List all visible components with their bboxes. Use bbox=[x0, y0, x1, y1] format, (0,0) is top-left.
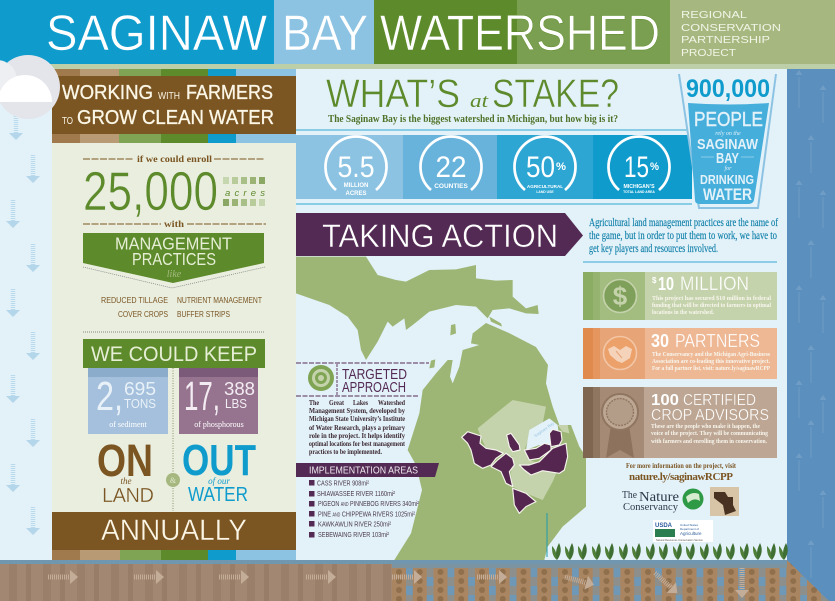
25,000 acres: 25,000 bbox=[83, 160, 218, 222]
implementation areas list bbox=[309, 478, 419, 539]
stat: tons of sediment bbox=[88, 368, 168, 434]
stats strip bbox=[296, 130, 692, 204]
practices list: REDUCED TILLAGE bbox=[101, 296, 168, 305]
heading: what's at stake: STAKE? bbox=[492, 72, 619, 116]
heading banner: TO bbox=[62, 116, 73, 127]
stat: 5.5 million acres bbox=[325, 136, 386, 197]
stat: 15% michigan's land area: TOTAL LAND AREA bbox=[623, 190, 655, 194]
stat: 50% agricultural land bbox=[514, 136, 575, 194]
implementation areas heading bbox=[296, 463, 439, 477]
subtitle: regional conservation partnership project bbox=[681, 10, 781, 59]
logo: michigan agri-business bbox=[710, 487, 739, 516]
soil band with arrows bbox=[0, 560, 829, 601]
management practices banner: MANAGEMENT bbox=[115, 234, 232, 254]
icon: glass of water, 900,000 people: PEOPLE bbox=[694, 109, 763, 131]
icon: medal bbox=[602, 394, 638, 458]
practices list: COVER CROPS bbox=[118, 310, 168, 319]
out of our water bbox=[182, 436, 256, 506]
icon: glass of water, 900,000 people: DRINKING bbox=[700, 172, 754, 187]
icon: glass of water, 900,000 people bbox=[679, 74, 776, 208]
stat: lbs of phosphorous: LBS bbox=[225, 396, 247, 411]
stat: 5.5 million acres: ACRES bbox=[345, 191, 367, 197]
panel: $10 million: funding that will be directed to farmers in optimal bbox=[652, 302, 771, 309]
stat: 15% michigan's land area bbox=[608, 136, 670, 194]
icon: dollar bbox=[604, 280, 636, 312]
targeted approach paragraph: Lakes bbox=[353, 398, 368, 407]
panel: 30 partners: Association are co-leading this innovative project. bbox=[652, 358, 770, 365]
logo: usda: Agriculture bbox=[680, 531, 702, 536]
implementation areas list: KAWKAWLIN RIVER 250mi² bbox=[318, 520, 391, 528]
panel: 100 certified crop advisors: 100 bbox=[651, 392, 679, 409]
management practices banner: like bbox=[167, 269, 182, 280]
implementation areas list: PIGEON AND PINNEBOG RIVERS 340mi² bbox=[318, 499, 419, 508]
panel: $10 million bbox=[583, 272, 777, 320]
heading banner bbox=[52, 76, 296, 134]
stat: 5.5 million acres: 5.5 bbox=[338, 151, 374, 184]
title: SAGINAW bbox=[46, 5, 268, 61]
implementation areas heading: IMPLEMENTATION AREAS bbox=[309, 466, 418, 476]
colour strip top bbox=[52, 69, 296, 143]
what's at stake subtitle: The Saginaw Bay is the biggest watershed in Michigan, but how big is it? bbox=[328, 114, 618, 125]
targeted approach paragraph: optimal locations for best management bbox=[309, 439, 405, 448]
stat: 50% agricultural land: LAND USE bbox=[536, 190, 554, 194]
panel: 100 certified crop advisors bbox=[583, 387, 777, 458]
stat: 5.5 million acres: MILLION bbox=[344, 183, 368, 189]
heading banner: GROW CLEAN WATER bbox=[77, 107, 274, 129]
targeted approach paragraph: Great bbox=[329, 398, 344, 407]
right water column with up arrows bbox=[787, 69, 835, 601]
upper peninsula bbox=[296, 257, 539, 360]
panel: 100 certified crop advisors: CROP ADVISORS bbox=[651, 407, 769, 424]
practices list: BUFFER STRIPS bbox=[177, 310, 230, 319]
management practices banner: PRACTICES bbox=[132, 249, 216, 269]
logo: usda: Department of bbox=[680, 527, 699, 531]
targeted approach paragraph: Watershed bbox=[378, 398, 406, 407]
panel: working with farmers bbox=[52, 69, 296, 560]
stat: tons of sediment: TONS bbox=[124, 396, 156, 411]
panel: $10 million: MILLION bbox=[680, 274, 749, 295]
targeted approach paragraph: practices to be implemented. bbox=[309, 447, 382, 456]
stat: tons of sediment: of sediment bbox=[109, 420, 148, 429]
taking action intro bbox=[589, 217, 778, 255]
stat: 22 counties: 22 bbox=[436, 151, 466, 184]
stat: lbs of phosphorous: 388 bbox=[224, 379, 255, 399]
map of michigan bbox=[296, 257, 586, 560]
panel: 30 partners bbox=[583, 328, 777, 379]
subtitle: regional conservation partnership project: PARTNERSHIP bbox=[681, 35, 770, 46]
more information: For more information on the project, visit bbox=[626, 461, 736, 470]
implementation areas list: SHIAWASSEE RIVER 1160mi² bbox=[317, 489, 395, 498]
stat: 15% michigan's land area: % bbox=[650, 161, 659, 173]
on the land: the bbox=[120, 476, 132, 486]
annually banner bbox=[52, 512, 296, 550]
ampersand badge: & bbox=[170, 476, 177, 485]
panel: 100 certified crop advisors: CERTIFIED bbox=[683, 392, 756, 409]
icon: glass of water, 900,000 people: BAY bbox=[716, 150, 739, 167]
targeted approach paragraph: Management System, developed by bbox=[309, 406, 405, 415]
we could keep banner: WE COULD KEEP bbox=[91, 342, 257, 366]
panel: $10 million: This project has secured $10 million in federal bbox=[652, 295, 771, 302]
targeted approach paragraph bbox=[309, 398, 406, 456]
logo: the nature conservancy bbox=[622, 488, 704, 513]
heading: what's at stake: at bbox=[470, 91, 489, 112]
logo: the nature conservancy: Conservancy bbox=[623, 501, 678, 513]
title: BAY bbox=[282, 5, 368, 61]
banner: taking action: TAKING ACTION bbox=[322, 218, 558, 254]
logo: usda: USDA bbox=[655, 523, 673, 529]
with divider: with bbox=[164, 220, 185, 230]
panel: 30 partners: 30 bbox=[651, 330, 669, 351]
out of our water: OUT bbox=[182, 436, 256, 485]
on the land: ON bbox=[97, 435, 153, 486]
taking action intro: the game, but in order to put them to work, we have to bbox=[589, 230, 777, 242]
icon: glass of water, 900,000 people: rely on the bbox=[715, 131, 741, 137]
stat: tons of sediment: 2, bbox=[96, 373, 123, 419]
implementation area regions bbox=[462, 429, 568, 513]
panel: 100 certified crop advisors: These are the people who make it happen, the bbox=[651, 423, 760, 430]
stat: 15% michigan's land area: 15 bbox=[624, 151, 649, 184]
stat: 22 counties: COUNTIES bbox=[434, 183, 468, 190]
teal marker line bbox=[546, 513, 548, 557]
ampersand badge bbox=[166, 473, 180, 487]
icon: glass of water, 900,000 people: 900,000 bbox=[686, 75, 770, 103]
panel: $10 million: 10 bbox=[658, 274, 674, 294]
25,000 acres: acres bbox=[225, 188, 265, 199]
out of our water: WATER bbox=[188, 484, 248, 506]
icon: glass of water, 900,000 people: WATER bbox=[703, 185, 752, 204]
more information: nature.ly/saginawRCPP bbox=[629, 471, 733, 483]
panel: targeted approach: TARGETED bbox=[342, 367, 407, 383]
panel: targeted approach: APPROACH bbox=[342, 380, 406, 396]
panel: 30 partners: The Conservancy and the Michigan Agri-Business bbox=[652, 351, 770, 358]
stat: 50% agricultural land: 50 bbox=[526, 151, 555, 184]
logo: the nature conservancy: Nature bbox=[639, 490, 679, 505]
left rain column with down arrows bbox=[6, 112, 40, 535]
stat: lbs of phosphorous bbox=[179, 368, 258, 434]
icon: glass of water, 900,000 people: SAGINAW bbox=[697, 136, 759, 153]
logo: usda: Natural Resources Conservation Service bbox=[656, 538, 703, 542]
header band bbox=[0, 0, 835, 69]
panel: 100 certified crop advisors: with farmers and enrolling them in conservation. bbox=[651, 438, 767, 445]
panel: 30 partners: For a full partner list, visit: nature.ly/saginawRCPP bbox=[652, 365, 770, 372]
stat: lbs of phosphorous: of phosphorous bbox=[194, 420, 244, 429]
panel: $10 million: locations in the watershed. bbox=[652, 309, 714, 316]
icon: cloud bbox=[0, 55, 60, 119]
panel: 30 partners: PARTNERS bbox=[675, 330, 760, 351]
out of our water: of our bbox=[208, 476, 230, 486]
subtitle: regional conservation partnership project: REGIONAL bbox=[681, 10, 748, 21]
subtitle: regional conservation partnership project: PROJECT bbox=[681, 48, 736, 59]
title: WATERSHED bbox=[380, 5, 660, 61]
heading banner: WITH bbox=[158, 91, 180, 102]
stat: 15% michigan's land area: MICHIGAN’S bbox=[623, 184, 655, 190]
on the land bbox=[97, 435, 154, 507]
heading: what's at stake: WHAT’S bbox=[326, 72, 460, 116]
saginaw bay label: Saginaw Bay bbox=[533, 421, 555, 438]
lower peninsula bbox=[394, 323, 586, 560]
practices list bbox=[101, 296, 262, 319]
crop plants bbox=[552, 543, 788, 560]
panel: targeted approach bbox=[296, 363, 429, 456]
saginaw bay bbox=[526, 418, 559, 450]
stat: tons of sediment: 695 bbox=[124, 379, 156, 399]
icon: handshake bbox=[604, 336, 636, 370]
stat: 50% agricultural land: AGRICULTURAL bbox=[527, 184, 563, 189]
watershed area bbox=[478, 400, 558, 500]
panel: $10 million: $ bbox=[652, 276, 657, 285]
stat: 50% agricultural land: % bbox=[556, 161, 566, 173]
heading banner: WORKING bbox=[62, 82, 153, 104]
logo: usda: United States bbox=[680, 523, 699, 527]
on the land: LAND bbox=[102, 485, 154, 507]
icon: glass of water, 900,000 people: for bbox=[724, 165, 732, 172]
more information bbox=[626, 461, 736, 483]
implementation areas list: CASS RIVER 908mi² bbox=[317, 478, 369, 488]
logo: the nature conservancy: The bbox=[622, 490, 638, 501]
heading: what's at stake bbox=[326, 72, 619, 116]
implementation areas list: PINE AND CHIPPEWA RIVERS 1025mi² bbox=[318, 510, 415, 518]
if we could enroll: if we could enroll bbox=[137, 155, 212, 165]
icon: target bbox=[308, 365, 334, 391]
targeted approach paragraph: of Water Research, plays a primary bbox=[309, 423, 405, 432]
implementation areas list: SEBEWAING RIVER 103mi² bbox=[318, 530, 389, 539]
panel: 100 certified crop advisors: voice of the project. They will be communicating bbox=[651, 430, 769, 437]
management practices banner bbox=[83, 233, 265, 288]
targeted approach paragraph: The bbox=[309, 398, 320, 407]
heading banner: FARMERS bbox=[186, 82, 273, 104]
targeted approach paragraph: Michigan State University’s Institute bbox=[309, 414, 406, 423]
taking action intro: get key players and resources involved. bbox=[589, 243, 718, 255]
colour strip bottom bbox=[52, 550, 296, 560]
title bbox=[46, 5, 660, 61]
subtitle: regional conservation partnership project: CONSERVATION bbox=[681, 23, 781, 34]
targeted approach paragraph: role in the project. It helps identify bbox=[309, 431, 405, 440]
logo: usda bbox=[653, 520, 713, 542]
stat: 22 counties bbox=[420, 136, 481, 190]
stat: lbs of phosphorous: 17, bbox=[184, 373, 220, 419]
practices list: NUTRIENT MANAGEMENT bbox=[177, 296, 262, 305]
annually banner: ANNUALLY bbox=[101, 514, 247, 547]
icon: dollar: $ bbox=[613, 281, 628, 311]
